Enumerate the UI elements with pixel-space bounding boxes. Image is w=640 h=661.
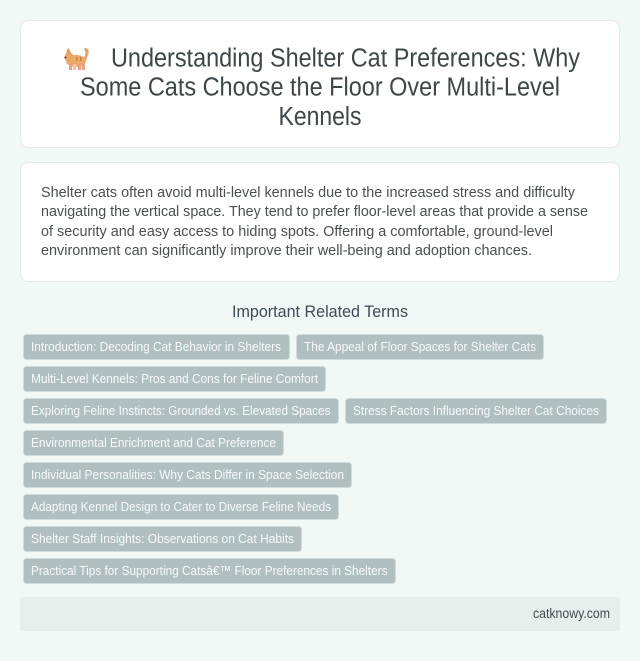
tag — [24, 462, 352, 488]
paragraph text: environment can significantly improve their well-being and adoption chances. — [41, 242, 532, 259]
tag: Practical Tips for Supporting Catsâ€™ Floor Preferences in Shelters — [31, 563, 388, 578]
paragraph text: Shelter cats often avoid multi-level kennels due to the increased stress and difficulty — [41, 184, 575, 201]
paragraph text — [41, 184, 588, 259]
tag — [24, 334, 290, 360]
tag: Individual Personalities: Why Cats Differ in Space Selection — [31, 467, 344, 482]
tag — [24, 526, 302, 552]
tag: Exploring Feline Instincts: Grounded vs. Elevated Spaces — [31, 403, 331, 418]
title — [80, 44, 580, 131]
panel: title card — [20, 20, 620, 148]
tag: Multi-Level Kennels: Pros and Cons for Feline Comfort — [31, 371, 318, 386]
tag: Stress Factors Influencing Shelter Cat Choices — [353, 403, 599, 418]
panel: summary paragraph — [20, 162, 620, 282]
tag: Adapting Kennel Design to Cater to Diverse Feline Needs — [31, 499, 331, 514]
tag: Environmental Enrichment and Cat Preference — [31, 435, 276, 450]
tag — [24, 398, 338, 424]
tag: The Appeal of Floor Spaces for Shelter Cats — [304, 339, 536, 354]
paragraph text: navigating the vertical space. They tend to prefer floor-level areas that provide a sense — [41, 203, 588, 220]
title: Kennels — [278, 103, 362, 131]
tag list — [24, 334, 606, 584]
paragraph text: of security and easy access to hiding spots. Offering a comfortable, ground-level — [41, 223, 553, 240]
tag — [24, 558, 396, 584]
tag — [346, 398, 606, 424]
footer bar — [20, 597, 620, 631]
tag — [24, 430, 284, 456]
icon: cat — [64, 48, 89, 70]
tag: Introduction: Decoding Cat Behavior in Shelters — [31, 339, 281, 354]
tag: Shelter Staff Insights: Observations on Cat Habits — [31, 531, 294, 546]
tag — [24, 366, 326, 392]
heading: important related terms: Important Related Terms — [232, 303, 408, 321]
title: Some Cats Choose the Floor Over Multi-Level — [80, 74, 560, 102]
footer source: catknowy.com — [533, 606, 610, 621]
tag — [24, 494, 338, 520]
tag — [296, 334, 544, 360]
title: Understanding Shelter Cat Preferences: Why — [111, 44, 580, 72]
